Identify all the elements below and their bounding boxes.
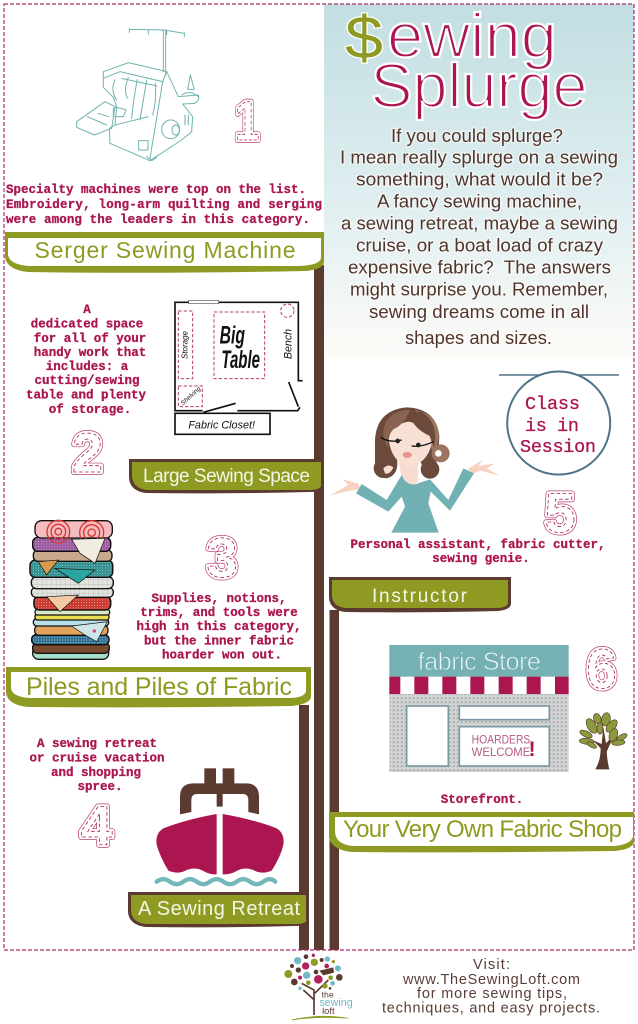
icon: ship bbox=[156, 768, 284, 884]
text: supplies: high in this category, bbox=[136, 620, 302, 634]
title word: Splurge: Splurge bbox=[370, 52, 588, 121]
numeral 5: 5 bbox=[544, 481, 576, 544]
text: sewing retreat: A sewing retreat bbox=[37, 737, 157, 751]
intro text block: A fancy sewing machine, bbox=[377, 192, 582, 212]
title bbox=[345, 2, 588, 121]
intro text block: If you could splurge? bbox=[391, 126, 563, 146]
logo wordmark: sewing bbox=[319, 997, 353, 1009]
numeral 2: 2 bbox=[72, 421, 103, 484]
sign: Instructor bbox=[329, 577, 511, 612]
numeral 5: 5 bbox=[544, 481, 576, 544]
numeral 1: 1 bbox=[234, 89, 260, 152]
sign: Your Very Own Fabric Shop: Your Very Own Fabric Shop bbox=[343, 816, 622, 843]
window text bbox=[472, 733, 536, 761]
text: supplies: trims, and tools were bbox=[140, 606, 298, 620]
numeral 3: 3 bbox=[206, 526, 238, 589]
window text: WELCOME bbox=[472, 745, 530, 759]
numeral 4: 4 bbox=[80, 794, 112, 857]
text: dedicated space bbox=[26, 303, 147, 417]
text: specialty machines bbox=[6, 183, 322, 227]
text: specialty machines: Specialty machines were top on the list. bbox=[6, 183, 306, 197]
label: Big Table: Big bbox=[220, 321, 245, 349]
label: Big Table bbox=[220, 321, 260, 374]
text: dedicated space: A bbox=[83, 303, 91, 317]
sign: A Sewing Retreat: A Sewing Retreat bbox=[138, 898, 300, 920]
intro text block bbox=[340, 126, 618, 348]
sign: Serger Sewing Machine: Serger Sewing Machine bbox=[34, 237, 296, 263]
sign: Instructor: Instructor bbox=[372, 586, 468, 607]
text: specialty machines: were among the leaders in this category. bbox=[6, 213, 310, 227]
numeral 6: 6 bbox=[586, 637, 616, 700]
intro text block: cruise, or a boat load of crazy bbox=[356, 236, 603, 256]
intro text block: sewing dreams come in all bbox=[369, 302, 589, 322]
logo wordmark: loft bbox=[322, 1006, 335, 1016]
illustration: fabric store bbox=[389, 645, 569, 772]
numeral 5: 5 bbox=[544, 481, 576, 544]
label: Big Table: Table bbox=[221, 347, 260, 374]
icon: class is in session sign: is in bbox=[525, 416, 579, 437]
text: dedicated space: of storage. bbox=[49, 403, 131, 417]
sign: A Sewing Retreat bbox=[128, 892, 306, 927]
sign: Serger Sewing Machine bbox=[5, 232, 324, 273]
numeral 2: 2 bbox=[72, 421, 103, 484]
numeral 6: 6 bbox=[586, 637, 616, 700]
logo wordmark bbox=[319, 990, 353, 1016]
window text: ! bbox=[528, 737, 536, 761]
icon: tree bbox=[579, 712, 628, 769]
title dollar sign: $ bbox=[345, 4, 383, 71]
intro text block: expensive fabric? The answers bbox=[348, 258, 611, 278]
numeral 2: 2 bbox=[72, 421, 103, 484]
text: specialty machines: Embroidery, long-arm quilting and serging bbox=[6, 198, 322, 212]
numeral 1: 1 bbox=[234, 89, 260, 152]
footer text: techniques, and easy projects. bbox=[382, 1000, 600, 1016]
text: dedicated space: handy work that bbox=[34, 346, 146, 360]
footer text bbox=[382, 957, 600, 1016]
footer text: for more sewing tips, bbox=[417, 986, 567, 1002]
numeral 4: 4 bbox=[80, 794, 112, 857]
intro text block: a sewing retreat, maybe a sewing bbox=[341, 214, 618, 234]
sign: Your Very Own Fabric Shop bbox=[329, 812, 634, 852]
numeral 4: 4 bbox=[80, 794, 112, 857]
text: sewing retreat: spree. bbox=[77, 780, 123, 794]
window text: HOARDERS bbox=[472, 733, 530, 747]
logo wordmark: the bbox=[322, 990, 334, 1000]
text: dedicated space: includes: a bbox=[46, 360, 129, 374]
text: dedicated space: for all of your bbox=[34, 332, 146, 346]
text: storefront: Storefront. bbox=[441, 793, 523, 807]
sign: Piles and Piles of Fabric bbox=[6, 667, 311, 707]
text: personal assistant: Personal assistant, fabric cutter, bbox=[350, 538, 606, 552]
text: dedicated space: table and plenty bbox=[26, 388, 147, 402]
text: sewing retreat: and shopping bbox=[51, 766, 141, 780]
sign: Large Sewing Space: Large Sewing Space bbox=[143, 466, 310, 487]
text: sewing retreat bbox=[29, 737, 165, 794]
intro text block: something, what would it be? bbox=[356, 170, 603, 190]
numeral 3: 3 bbox=[206, 526, 238, 589]
store sign text: fabric Store bbox=[418, 648, 541, 676]
label: Shelving: Shelving bbox=[180, 385, 203, 407]
floor plan bbox=[175, 300, 303, 434]
icon: class is in session sign bbox=[499, 372, 619, 474]
illustration: personal assistant woman bbox=[329, 407, 499, 533]
text: supplies: Supplies, notions, bbox=[151, 592, 287, 606]
text: supplies: but the inner fabric bbox=[144, 634, 294, 648]
posts bbox=[299, 265, 339, 950]
numeral 1: 1 bbox=[234, 89, 260, 152]
logo: The Sewing Loft tree bbox=[284, 954, 353, 1020]
icon: class is in session sign: Class bbox=[525, 394, 580, 415]
icon: stack of fabric bbox=[30, 520, 113, 659]
text: dedicated space: dedicated space bbox=[31, 318, 143, 332]
title word: ewing: ewing bbox=[387, 2, 557, 71]
numeral 6: 6 bbox=[586, 637, 616, 700]
text: supplies bbox=[136, 592, 302, 662]
footer text: Visit: bbox=[473, 957, 510, 973]
label: Storage: Storage bbox=[180, 330, 189, 359]
icon: serger sewing machine bbox=[77, 28, 199, 161]
text: personal assistant: sewing genie. bbox=[432, 552, 530, 566]
sign: Large Sewing Space bbox=[129, 459, 322, 493]
intro text block: might surprise you. Remember, bbox=[350, 280, 608, 300]
text: sewing retreat: or cruise vacation bbox=[29, 752, 165, 766]
intro text block: shapes and sizes. bbox=[405, 328, 552, 348]
text: supplies: hoarder won out. bbox=[162, 648, 282, 662]
footer text: www.TheSewingLoft.com bbox=[402, 972, 580, 988]
label: Bench: Bench bbox=[283, 329, 295, 359]
icon: class is in session sign: Session bbox=[520, 437, 596, 458]
panel: title background bbox=[324, 4, 634, 358]
text: dedicated space: cutting/sewing bbox=[34, 374, 140, 388]
text: personal assistant bbox=[350, 538, 606, 566]
sign: Piles and Piles of Fabric: Piles and Piles of Fabric bbox=[26, 673, 292, 701]
intro text block: I mean really splurge on a sewing bbox=[340, 148, 618, 168]
label: Fabric Closet: Fabric Closet! bbox=[188, 420, 256, 432]
numeral 3: 3 bbox=[206, 526, 238, 589]
